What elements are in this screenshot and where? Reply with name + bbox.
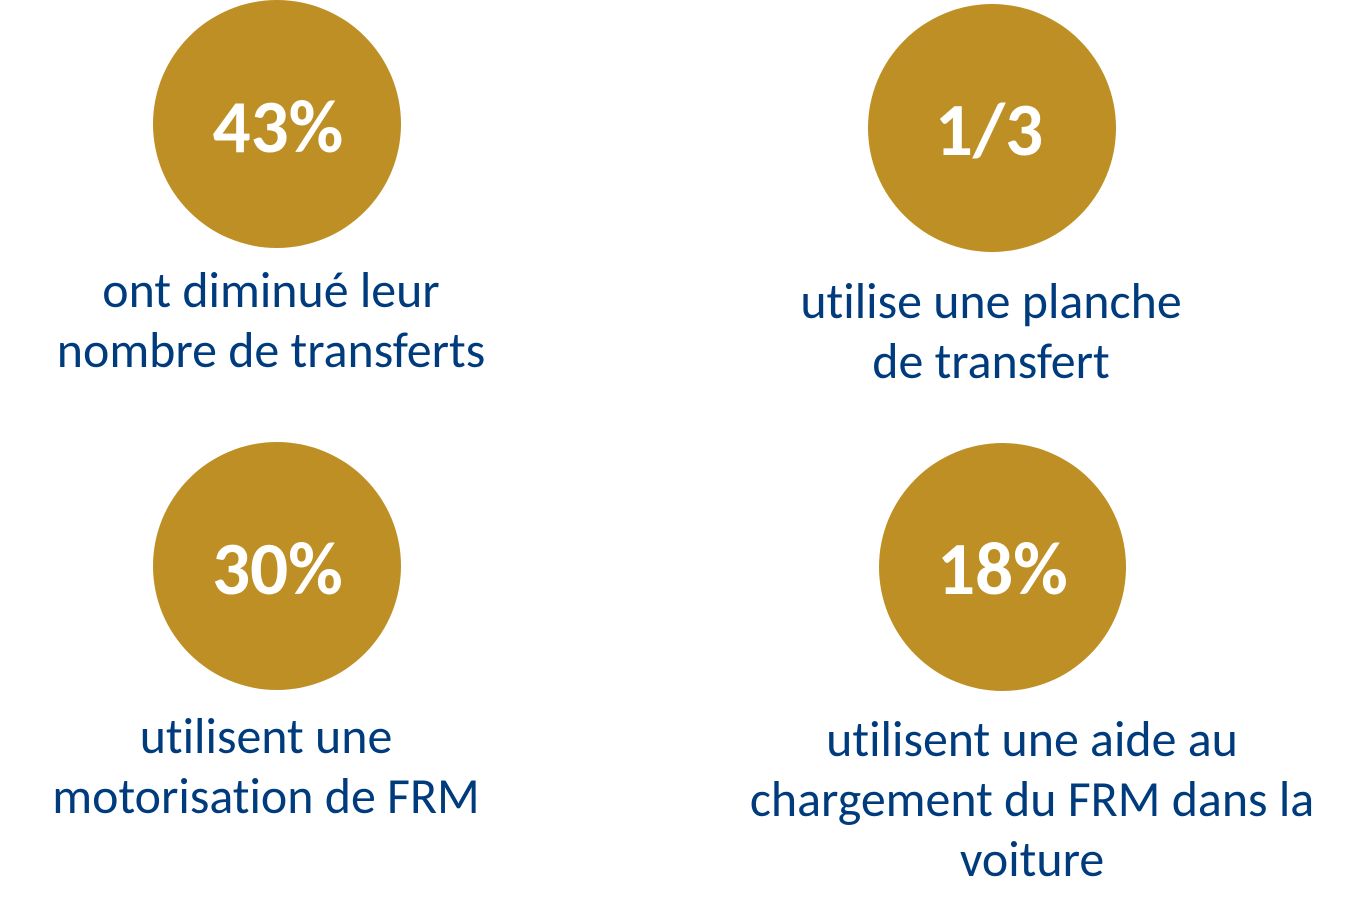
circle: 1/3: 1/3	[935, 85, 1043, 176]
text: 43% caption	[57, 260, 485, 381]
stat block: 43%	[57, 0, 485, 381]
text: 18% caption: chargement du FRM dans la	[750, 769, 1314, 830]
text: 30% caption	[52, 706, 480, 827]
text: 18% caption: voiture	[960, 829, 1104, 890]
text: 1/3 caption	[800, 271, 1182, 392]
text: 1/3 caption: utilise une planche	[800, 271, 1182, 332]
text: 43% caption: ont diminué leur	[102, 260, 440, 321]
text: 30% caption: motorisation de FRM	[52, 766, 480, 827]
circle: 30%: 30%	[212, 524, 343, 615]
text: 30% caption: utilisent une	[140, 706, 392, 767]
circle: 1/3	[868, 4, 1116, 252]
stat block: 1/3	[800, 4, 1182, 392]
circle: 43%	[153, 0, 401, 248]
circle: 43%: 43%	[213, 82, 343, 173]
text: 18% caption	[750, 709, 1314, 890]
circle: 18%: 18%	[937, 524, 1068, 615]
stat block: 18%	[750, 443, 1314, 890]
circle: 18%	[879, 443, 1126, 691]
text: 1/3 caption: de transfert	[872, 331, 1110, 392]
stat block: 30%	[52, 442, 480, 827]
text: 43% caption: nombre de transferts	[57, 320, 485, 381]
circle: 30%	[153, 442, 401, 690]
text: 18% caption: utilisent une aide au	[826, 709, 1238, 770]
